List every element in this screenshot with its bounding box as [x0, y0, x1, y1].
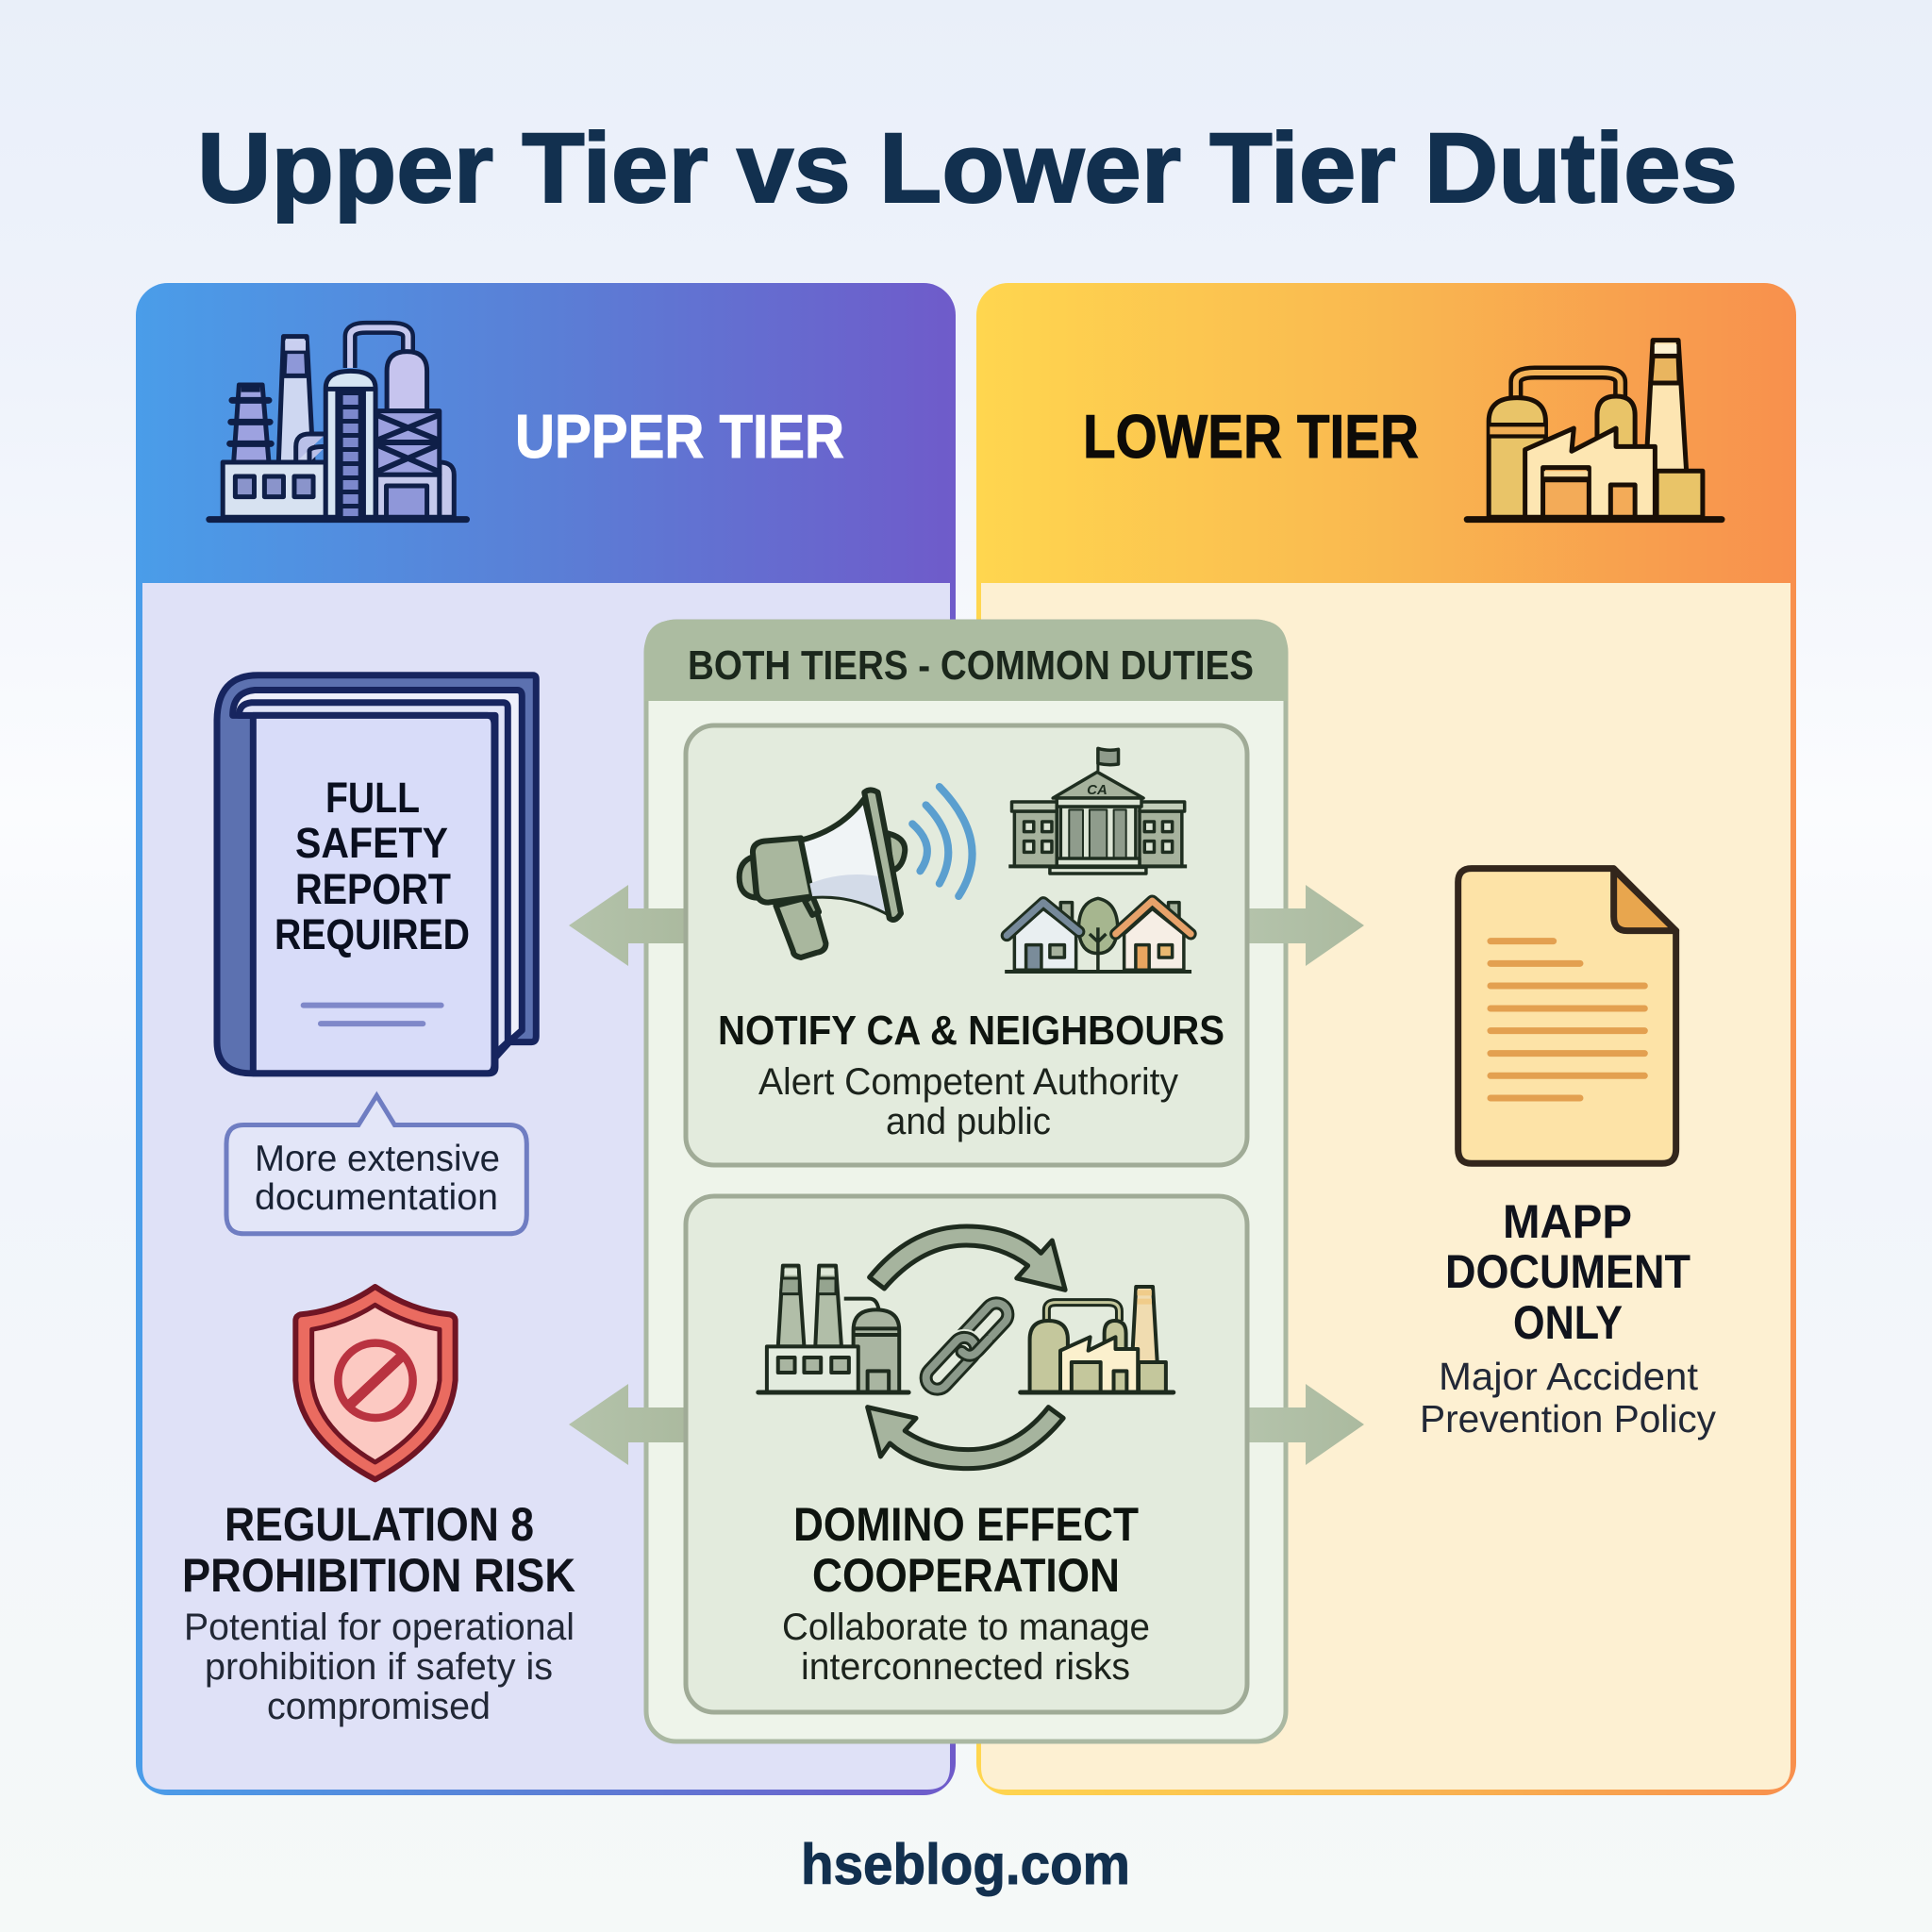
text: full safety report required: FULL	[325, 774, 420, 822]
panel: both tiers common duties	[644, 620, 1288, 1741]
icon: neighbouring houses	[1005, 898, 1191, 972]
text: notify heading and description: Alert Competent Authority	[758, 1061, 1178, 1103]
icon: upper tier refinery	[209, 327, 466, 520]
icon: MAPP document	[1458, 869, 1676, 1163]
icon: circular arrows	[868, 1226, 1065, 1469]
text: regulation 8 prohibition risk: compromised	[267, 1686, 491, 1727]
text: MAPP document only: Prevention Policy	[1420, 1397, 1716, 1441]
text: MAPP document only: ONLY	[1513, 1296, 1623, 1349]
panel: lower tier	[976, 283, 1796, 1795]
text: MAPP document only: Major Accident	[1439, 1355, 1699, 1398]
text: notify heading and description: NOTIFY CA & NEIGHBOURS	[718, 1008, 1224, 1054]
icon: lower tier factory	[1467, 341, 1722, 520]
text: regulation 8 prohibition risk: Potential for operational	[184, 1607, 575, 1648]
text: notify heading and description: and public	[886, 1101, 1051, 1142]
text: regulation 8 prohibition risk: PROHIBITION RISK	[182, 1549, 575, 1602]
arrow: domino to lower tier	[1248, 1384, 1364, 1465]
text: full safety report required	[275, 774, 470, 958]
panel: upper tier	[136, 283, 956, 1795]
arrow: notify to lower tier	[1248, 885, 1364, 966]
callout: more extensive documentation: documentation	[255, 1177, 498, 1218]
icon: safety report book	[217, 675, 536, 1074]
text: domino heading and description: DOMINO EFFECT	[793, 1498, 1139, 1551]
callout: more extensive documentation: More extensive	[255, 1139, 500, 1179]
card: domino effect cooperation	[686, 1196, 1247, 1712]
text: MAPP document only	[1420, 1195, 1716, 1441]
text: domino heading and description: Collaborate to manage	[782, 1607, 1150, 1648]
icon: megaphone	[740, 787, 973, 958]
title: Upper Tier vs Lower Tier Duties	[197, 113, 1738, 224]
arrow: domino to upper tier	[569, 1384, 686, 1465]
heading: lower tier: LOWER TIER	[1083, 402, 1419, 471]
icon: factory right	[1021, 1287, 1174, 1392]
icon: competent authority building	[1008, 748, 1187, 874]
heading: upper tier: UPPER TIER	[515, 402, 844, 471]
text: regulation 8 prohibition risk: REGULATION 8	[225, 1498, 534, 1551]
text: domino heading and description: COOPERATION	[812, 1549, 1120, 1602]
text: notify heading and description	[718, 1008, 1224, 1142]
text: regulation 8 prohibition risk	[182, 1498, 575, 1727]
text: domino heading and description: interconnected risks	[801, 1646, 1130, 1688]
icon: chain link	[922, 1298, 1012, 1394]
text: full safety report required: REQUIRED	[275, 910, 470, 958]
text: MAPP document only: DOCUMENT	[1445, 1245, 1690, 1298]
text: full safety report required: REPORT	[295, 865, 451, 913]
arrow: notify to upper tier	[569, 885, 686, 966]
text: MAPP document only: MAPP	[1503, 1195, 1632, 1248]
icon: competent authority building: CA	[1087, 782, 1108, 798]
icon: factory left	[758, 1266, 908, 1392]
heading: common duties: BOTH TIERS - COMMON DUTIES	[688, 642, 1254, 689]
icon: prohibition shield	[295, 1287, 456, 1479]
footer: hseblog.com: hseblog.com	[801, 1833, 1130, 1896]
text: full safety report required: SAFETY	[295, 819, 448, 867]
callout: more extensive documentation	[226, 1095, 526, 1234]
text: domino heading and description	[782, 1498, 1150, 1688]
card: notify CA and neighbours	[686, 725, 1247, 1165]
text: regulation 8 prohibition risk: prohibition if safety is	[205, 1646, 553, 1688]
